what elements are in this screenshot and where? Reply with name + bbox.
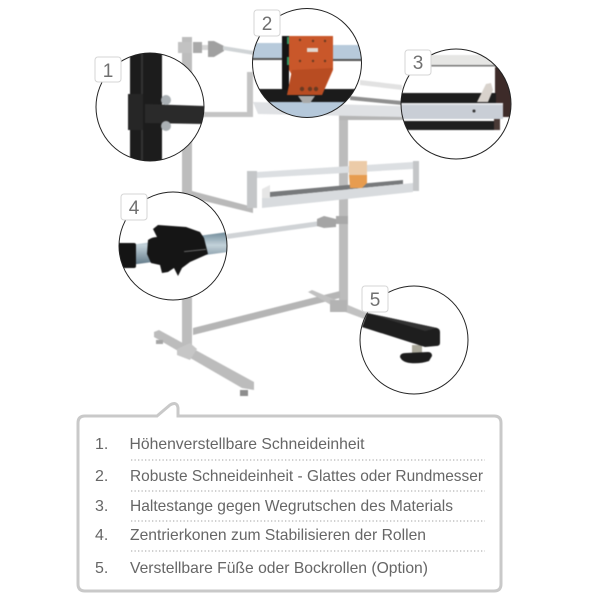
lower roller rod with clamp [227,216,348,239]
number badge 3: 3 [413,53,423,74]
item 3: 3. [95,498,108,515]
detail circle 2: cutter head [250,8,365,118]
upper right arm [339,113,404,120]
number badge 2: 2 [262,14,272,35]
number badge 1 [95,57,121,82]
number badge 4 [121,194,147,220]
item 2: Robuste Schneideinheit - Glattes oder Rundmesser [130,468,484,485]
number badge 5 [362,286,388,312]
lower left diagonal arm [192,191,253,213]
speech bubble outline [78,404,501,591]
number badge 4: 4 [129,198,140,219]
detail circle 3: holding bar [400,49,511,159]
item 5: Verstellbare Füße oder Bockrollen (Option) [130,560,428,577]
machine frame illustration [154,37,419,396]
item 4: 4. [95,527,108,544]
upper left arm [192,72,253,117]
detail circle 5: adjustable foot [360,286,468,394]
item 1: 1. [95,436,108,453]
number badge 5: 5 [370,290,380,311]
item 2: 2. [95,468,108,485]
top roller rod with clamp [178,41,254,57]
number badge 1: 1 [103,61,113,82]
callout: feature list [78,404,501,591]
item 5: 5. [95,560,108,577]
base feet and brace [154,290,367,396]
detail circle 1: frame bracket [96,50,204,165]
item 3: Haltestange gegen Wegrutschen des Materials [130,498,453,515]
detail circle 4: centering cone [117,192,228,300]
left upright [182,37,192,347]
right upright [339,113,348,308]
number badge 3 [405,50,431,75]
upper cutter bars [253,80,402,117]
item 4: Zentrierkonen zum Stabilisieren der Rollen [130,527,426,544]
small cutter head [349,161,367,175]
item 1: Höhenverstellbare Schneideinheit [130,436,365,453]
lower cutter unit [247,161,419,208]
number badge 2 [254,10,280,36]
